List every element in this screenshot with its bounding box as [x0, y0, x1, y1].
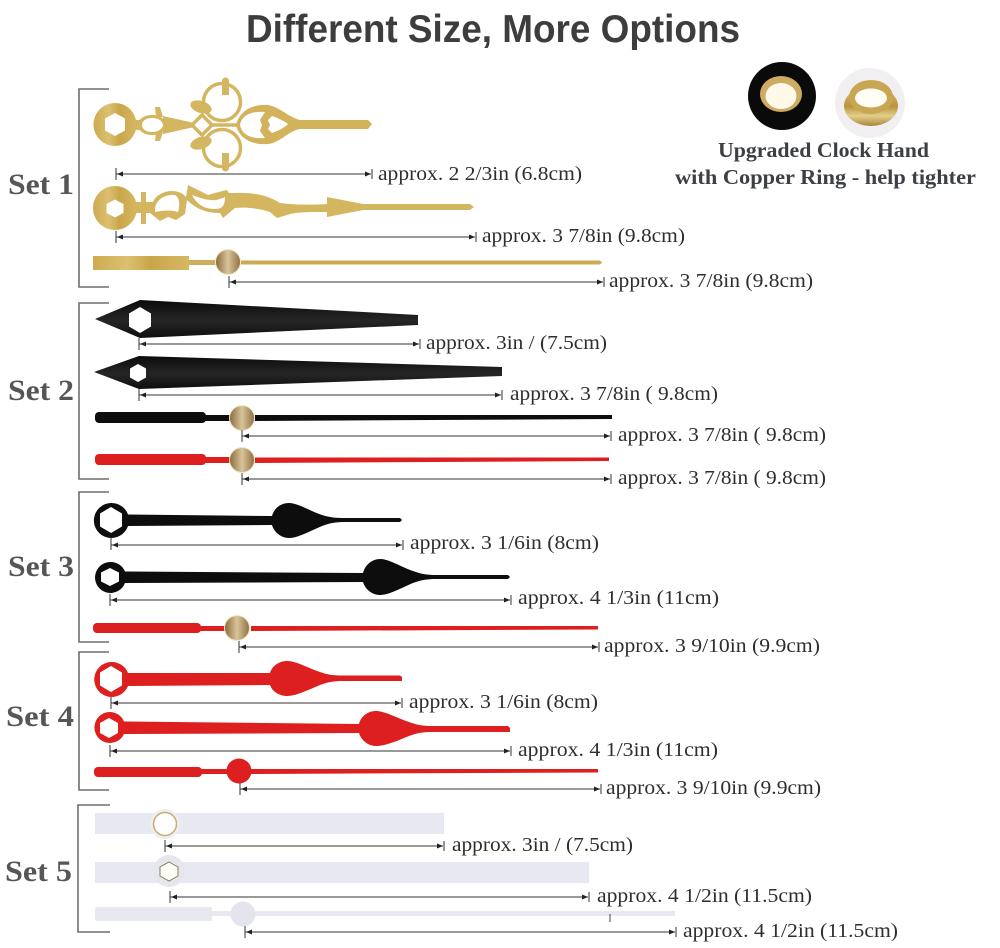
size label: approx. 2 2/3in (6.8cm) [378, 164, 582, 185]
tick mark [609, 914, 611, 922]
size label: approx. 4 1/3in (11cm) [518, 588, 719, 609]
set 4 bracket [79, 652, 109, 790]
dimension: 3 7/8in [242, 473, 611, 485]
panel: copper ring callout [675, 62, 976, 189]
hand: black spade hour hand [95, 300, 418, 338]
hand: red spade minute hand [94, 711, 510, 746]
callout text: Upgraded Clock Hand [718, 138, 929, 162]
panel: set 3 [8, 492, 820, 657]
set 1 bracket [79, 89, 109, 287]
hand: black second hand [95, 406, 612, 430]
hand: red second hand [93, 616, 598, 640]
dimension: 3 9/10in [239, 641, 599, 653]
hand: black spade minute hand [94, 356, 502, 389]
dimension: 3 7/8in [229, 276, 604, 288]
hand: red second hand with red cap [94, 758, 598, 784]
ornament lobes [189, 78, 229, 172]
dimension: 3 7/8in [242, 430, 611, 442]
callout text: with Copper Ring - help tighter [675, 165, 976, 189]
size label: approx. 3in / (7.5cm) [426, 333, 607, 354]
dimension: 4 1/3in [110, 594, 511, 606]
dimension: 4 1/2in [170, 891, 589, 903]
size label: approx. 3 9/10in (9.9cm) [604, 636, 820, 657]
size label: approx. 3 7/8in ( 9.8cm) [618, 425, 826, 446]
dimension: 4 1/2in [245, 926, 676, 938]
hand: white hour hand [95, 809, 444, 839]
callout text [675, 138, 976, 189]
panel: set 2 [8, 300, 826, 489]
panel: set 1 [8, 78, 813, 292]
hand: black spade minute hand [95, 559, 510, 595]
hand: black spade hour hand [94, 503, 402, 538]
dimension: 3 9/10in [240, 783, 601, 795]
dimension: 2 2/3in [116, 168, 372, 180]
dimension: 3 1/6in [111, 697, 402, 709]
set 3 label: Set 3 [8, 550, 74, 583]
set 4 label: Set 4 [6, 700, 74, 733]
panel: set 4 [6, 652, 821, 799]
dimension: 3in [165, 840, 444, 852]
hand: red second hand [95, 448, 609, 472]
dimension: 3 1/6in [111, 538, 403, 550]
set 1 label: Set 1 [8, 168, 74, 201]
size label: approx. 3 7/8in (9.8cm) [609, 271, 813, 292]
size label: approx. 3 7/8in ( 9.8cm) [618, 468, 826, 489]
hand: red spade hour hand [94, 661, 402, 697]
set 2 bracket [79, 303, 109, 479]
dimension: 3 7/8in [116, 231, 476, 243]
size label: approx. 3 7/8in (9.8cm) [482, 226, 685, 247]
panel: set 5 [5, 805, 898, 942]
size label: approx. 4 1/3in (11cm) [518, 740, 718, 761]
size label: approx. 3 1/6in (8cm) [409, 692, 598, 713]
set 5 label: Set 5 [5, 855, 72, 888]
dimension: 3in [139, 338, 420, 350]
set 2 label: Set 2 [8, 374, 74, 407]
size label: approx. 3 9/10in (9.9cm) [606, 778, 821, 799]
size label: approx. 4 1/2in (11.5cm) [683, 921, 898, 942]
icon: black hand with copper ring [748, 62, 816, 130]
size label: approx. 4 1/2in (11.5cm) [597, 886, 812, 907]
hand: ornate gold minute hand [93, 185, 474, 230]
dimension: 3 7/8in [139, 389, 502, 401]
size label: approx. 3 7/8in ( 9.8cm) [510, 384, 718, 405]
size label: approx. 3 1/6in (8cm) [410, 533, 599, 554]
hand: gold second hand [93, 250, 602, 274]
set 3 bracket [79, 492, 109, 642]
hand: white second hand [95, 902, 675, 926]
dimension: 4 1/3in [110, 745, 511, 757]
set 5 bracket [78, 805, 110, 932]
hand: white minute hand [95, 855, 589, 887]
size label: approx. 3in / (7.5cm) [452, 835, 633, 856]
hand: ornate gold hour hand [94, 78, 372, 172]
title: Different Size, More Options [246, 8, 740, 51]
icon: copper ring [835, 68, 905, 138]
